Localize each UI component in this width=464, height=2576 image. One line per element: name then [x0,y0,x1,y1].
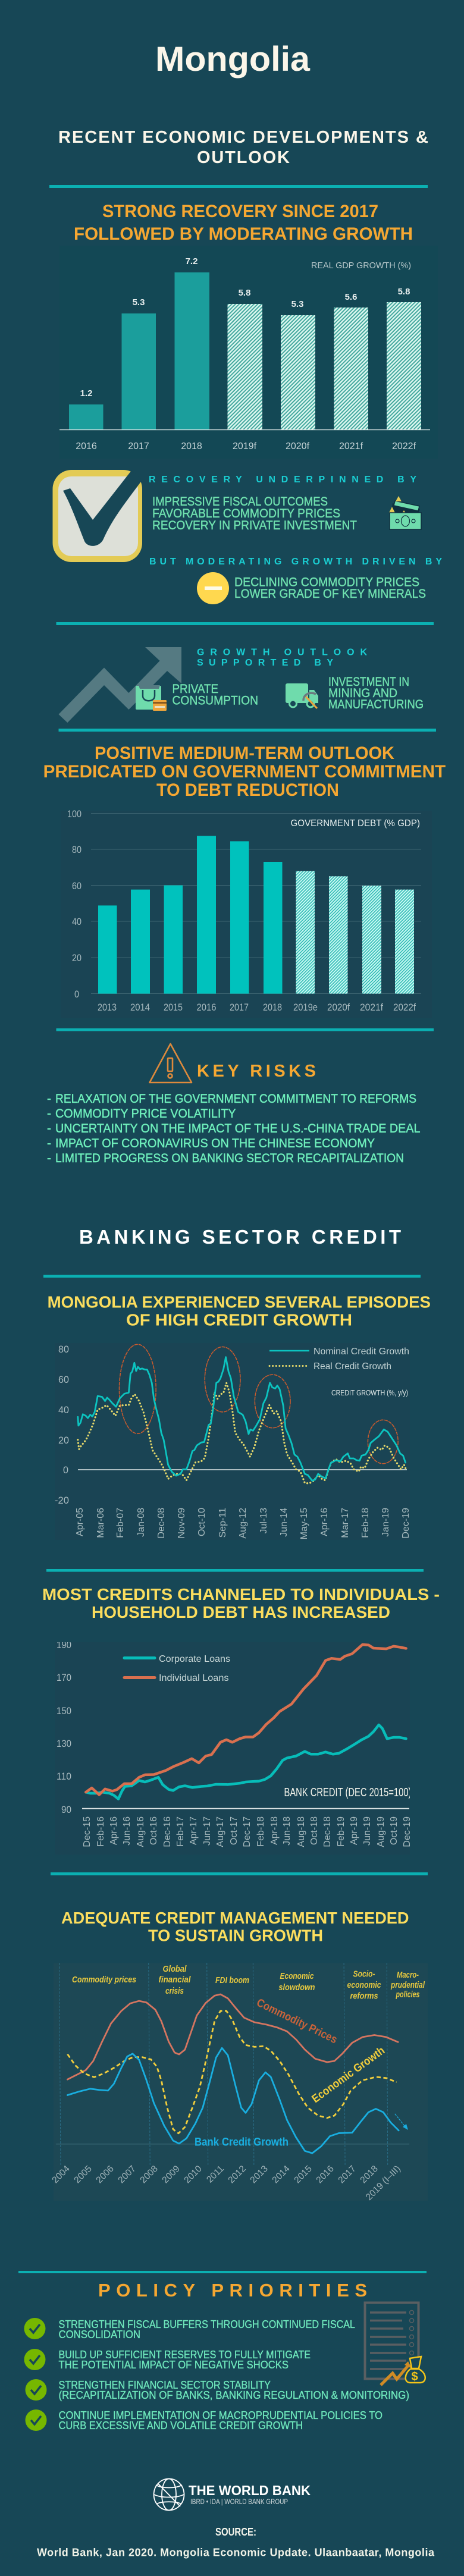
heading: policy priorities: POLICY PRIORITIES [98,2280,367,2301]
x axis labels: Oct-19 [389,1816,399,1845]
x axis labels: Apr-05 [75,1508,85,1536]
section heading: recent economic developments: OUTLOOK [197,148,290,167]
y axis labels: 0 [74,989,79,1000]
icon: shopping bag with card [136,685,167,711]
source citation: World Bank, Jan 2020. Mongolia Economic Update. Ulaanbaatar, Mongolia [37,2547,435,2559]
year labels [76,441,416,451]
y axis labels: 170 [57,1672,71,1683]
x axis labels: 2012 [226,2164,248,2185]
text block: recovery drivers: FAVORABLE COMMODITY PRICES [152,507,340,520]
y axis labels: 60 [72,880,81,892]
heading: adequate credit management: TO SUSTAIN GROWTH [148,1926,323,1944]
x axis labels: 2016 [314,2164,336,2185]
priority 2 [24,2349,311,2371]
x axis labels: Apr-18 [269,1816,280,1845]
legend: Nominal Credit Growth [313,1347,409,1357]
text: investment in mining and manufacturing: MINING AND [328,686,397,700]
heading: several episodes: OF HIGH CREDIT GROWTH [126,1311,352,1329]
x axis labels: Feb-18 [256,1816,266,1847]
priority 1: STRENGTHEN FISCAL BUFFERS THROUGH CONTINUED FISCAL [58,2318,355,2330]
text: private consumption: PRIVATE [173,682,218,696]
chart subtitle: government debt: GOVERNMENT DEBT (% GDP) [290,818,420,829]
period labels: prudential [390,1981,425,1990]
x axis labels: Apr-17 [189,1816,199,1845]
x axis labels: Dec-19 [401,1508,411,1539]
y axis labels: 60 [58,1374,69,1385]
x axis labels: 2009 [160,2164,182,2185]
priority 4 [25,2409,383,2431]
x axis labels: Feb-07 [115,1508,126,1538]
section heading: recent economic developments [58,128,428,167]
x axis labels: Jan-19 [381,1508,391,1537]
label: growth outlook supported by: SUPPORTED BY [197,658,333,668]
priority 1: CONSOLIDATION [58,2329,140,2340]
series: bank credit growth [67,2048,399,2153]
priority 4: CONTINUE IMPLEMENTATION OF MACROPRUDENTIAL POLICIES TO [58,2409,383,2421]
x axis labels: 2014 [270,2164,292,2185]
title: Mongolia [155,40,311,79]
legend: Real Credit Growth [313,1361,391,1372]
value labels: 7.2 [186,256,197,266]
heading: most credits channeled [42,1585,440,1621]
heading: positive medium-term outlook: POSITIVE MEDIUM-TERM OUTLOOK [95,743,394,763]
text: investment in mining and manufacturing: INVESTMENT IN [328,675,409,689]
x axis labels: 2013 [98,1002,117,1013]
period labels: economic [347,1981,381,1990]
priority 2: THE POTENTIAL IMPACT OF NEGATIVE SHOCKS [58,2359,289,2371]
x axis labels: Jun-19 [362,1816,372,1846]
x axis labels: 2019 (I–III) [364,2164,403,2202]
label: growth outlook supported by: GROWTH OUTLOOK [197,647,367,658]
text: investment in mining and manufacturing: MANUFACTURING [328,698,424,711]
period labels [72,1965,425,2001]
plotted series [86,1645,406,1799]
legend [123,1655,230,1681]
logo: the world bank: IBRD • IDA | WORLD BANK GROUP [190,2497,288,2506]
x axis labels: 2021f [360,1002,383,1013]
text block: recovery drivers: IMPRESSIVE FISCAL OUTCOMES [152,495,328,509]
period labels: slowdown [278,1983,315,1993]
y axis labels [57,1639,71,1815]
value labels: 5.3 [291,299,303,309]
logo: the world bank: THE WORLD BANK [189,2483,311,2498]
period labels: crisis [165,1987,184,1996]
section heading: banking sector credit: BANKING SECTOR CREDIT [79,1226,401,1248]
x axis labels: Apr-19 [349,1816,359,1845]
x axis labels: May-15 [299,1508,309,1539]
x axis labels: Dec-15 [82,1816,92,1847]
x axis labels: Oct-10 [197,1508,207,1536]
plotted lines [57,1963,409,2166]
y axis labels: 110 [57,1771,71,1782]
y axis labels: 0 [63,1464,68,1476]
text: investment in mining and manufacturing [328,675,424,711]
y axis labels: 20 [58,1435,69,1446]
series: corporate loans [86,1725,406,1799]
line chart: credit growth [55,1343,411,1540]
icon: large check box [52,470,142,562]
period labels: Economic [280,1972,314,1981]
x axis labels: Oct-16 [149,1816,159,1845]
list: key risks: - [47,1137,51,1150]
priority 2: BUILD UP SUFFICIENT RESERVES TO FULLY MITIGATE [58,2349,311,2361]
x axis labels: 2011 [205,2164,226,2185]
y axis labels [67,808,81,1000]
heading: positive medium-term outlook [43,743,446,800]
list: policy priorities [24,2318,409,2431]
x axis labels: 2004 [50,2164,72,2185]
series: economic growth [67,2011,397,2133]
x axis labels: 2015 [164,1002,183,1013]
text block: moderating drivers [234,576,426,601]
curve label: economic growth: Economic Growth [310,2044,387,2106]
y axis labels: 190 [57,1639,71,1651]
x axis labels: 2014 [130,1002,150,1013]
bars: forecasts [296,871,414,994]
year labels: 2016 [76,441,97,451]
period labels: reforms [350,1992,378,2001]
bars: actuals [98,836,282,994]
list: key risks: RELAXATION OF THE GOVERNMENT COMMITMENT TO REFORMS [55,1092,416,1106]
x axis labels: Dec-18 [322,1816,333,1847]
year labels: 2018 [181,441,202,451]
arrow head [403,2124,408,2130]
icon: globe [153,2479,184,2510]
x axis labels: Nov-09 [177,1508,187,1539]
icon: minus circle [197,572,229,604]
list: key risks: LIMITED PROGRESS ON BANKING SECTOR RECAPITALIZATION [55,1151,404,1165]
period labels: Macro- [397,1971,419,1980]
x axis labels: Feb-17 [175,1816,186,1847]
x axis labels: Jun-17 [202,1816,212,1846]
list: key risks [47,1092,420,1165]
heading: several episodes [48,1293,431,1329]
section heading: recent economic developments: RECENT ECONOMIC DEVELOPMENTS & [58,128,428,147]
series: commodity prices [67,1994,398,2079]
x axis labels: Feb-19 [336,1816,346,1847]
y axis labels: 90 [61,1804,71,1815]
x axis labels: 2015 [292,2164,314,2185]
series: real credit growth [78,1383,406,1483]
curve label: commodity prices: Commodity Prices [255,1997,339,2046]
x axis labels: Aug-17 [215,1816,225,1847]
x axis labels: Dec-16 [162,1816,173,1847]
x axis labels: Dec-08 [156,1508,167,1539]
chart subtitle: bank credit: BANK CREDIT (DEC 2015=100) [284,1786,412,1799]
x axis labels: 2008 [138,2164,160,2185]
list: key risks: COMMODITY PRICE VOLATILITY [55,1107,236,1121]
text block: recovery drivers [152,495,357,532]
x axis labels [75,1508,411,1539]
icon: rising zigzag arrow [58,647,181,723]
priority 1 [24,2318,355,2340]
bar chart: government debt [61,808,432,1018]
priority 3 [25,2379,409,2401]
x axis labels: Feb-16 [96,1816,106,1847]
x axis labels: 2019e [293,1002,318,1013]
value labels: 1.2 [80,388,92,399]
x axis labels: 2022f [393,1002,416,1013]
x axis labels: Jun-18 [282,1816,292,1846]
year labels: 2022f [392,441,416,451]
heading: strong recovery: STRONG RECOVERY SINCE 2017 [102,202,378,221]
value labels: 5.8 [239,288,250,298]
heading: key risks: KEY RISKS [197,1062,316,1081]
value labels: 5.8 [398,287,410,297]
heading: positive medium-term outlook: PREDICATED ON GOVERNMENT COMMITMENT [43,762,446,782]
x axis labels: Jul-13 [259,1508,269,1534]
text block: moderating drivers: LOWER GRADE OF KEY MINERALS [234,587,426,601]
text block: recovery drivers: RECOVERY IN PRIVATE INVESTMENT [152,519,357,532]
label: growth outlook supported by [197,647,367,668]
series: nominal credit growth [78,1357,406,1480]
year labels: 2021f [339,441,363,451]
x axis labels [50,2164,403,2202]
period labels: Socio- [353,1970,375,1979]
x axis labels [98,1002,416,1013]
series: individual loans [86,1645,406,1794]
text: private consumption: CONSUMPTION [173,694,258,708]
x axis labels: Feb-18 [360,1508,371,1538]
priority 4: CURB EXCESSIVE AND VOLATILE CREDIT GROWTH [58,2420,303,2431]
icon: checklist document with money bag [365,2303,425,2385]
y axis labels: 100 [67,808,81,820]
x axis labels: 2013 [248,2164,270,2185]
icon: money [389,496,421,529]
heading: several episodes: MONGOLIA EXPERIENCED SEVERAL EPISODES [48,1293,431,1311]
x axis labels: Aug-12 [238,1508,248,1539]
x axis labels: 2016 [196,1002,217,1013]
value labels: 5.6 [345,292,357,302]
plotted series [78,1344,406,1483]
list: key risks: - [47,1092,51,1106]
y axis labels: 80 [58,1344,69,1355]
y axis labels: 150 [57,1705,71,1717]
x axis labels: 2007 [116,2164,138,2185]
x axis labels: Dec-19 [402,1816,412,1847]
x axis labels: Oct-17 [229,1816,239,1845]
x axis labels: Aug-16 [136,1816,146,1847]
y axis labels [55,1344,69,1506]
period labels: policies [396,1990,420,2000]
value labels [80,256,410,399]
chart subtitle: credit growth: CREDIT GROWTH (%, y/y) [331,1389,408,1397]
x axis labels: Oct-18 [309,1816,319,1845]
x axis labels: Jun-16 [122,1816,132,1846]
line chart: credit, growth and commodity prices [50,1963,428,2202]
y axis labels: 40 [58,1404,69,1416]
y axis labels: 40 [72,916,81,927]
year labels: 2020f [286,441,310,451]
bars: actuals [69,272,209,429]
list: key risks: IMPACT OF CORONAVIRUS ON THE CHINESE ECONOMY [55,1137,375,1150]
period labels: Commodity prices [72,1975,136,1985]
year labels: 2017 [128,441,149,451]
x axis labels: 2006 [94,2164,116,2185]
text: private consumption [173,682,258,708]
legend [269,1347,409,1372]
x axis labels: Mar-17 [340,1508,350,1538]
period labels: Global [163,1965,187,1974]
legend: Corporate Loans [159,1654,230,1664]
x axis labels: 2018 [263,1002,282,1013]
x axis labels: Jun-14 [279,1508,289,1537]
text block: moderating drivers: DECLINING COMMODITY PRICES [234,576,419,589]
source label: SOURCE: [215,2526,256,2538]
curve label: bank credit growth: Bank Credit Growth [195,2136,289,2148]
priority 3: STRENGTHEN FINANCIAL SECTOR STABILITY [58,2379,271,2391]
x axis labels: Dec-17 [242,1816,252,1847]
x axis labels: Jan-08 [136,1508,146,1537]
x axis labels: 2010 [182,2164,204,2185]
label: but moderating growth driven by: BUT MODERATING GROWTH DRIVEN BY [149,557,442,567]
y axis labels: 80 [72,844,81,855]
arrow: credit trend [395,2114,405,2126]
heading: most credits channeled: MOST CREDITS CHANNELED TO INDIVIDUALS - [42,1585,440,1604]
value labels: 5.3 [133,297,145,308]
y axis labels: 130 [57,1738,71,1749]
period labels: financial [158,1975,191,1985]
x axis labels: 2017 [230,1002,249,1013]
heading: most credits channeled: HOUSEHOLD DEBT HAS INCREASED [92,1603,390,1621]
x axis labels: Aug-19 [376,1816,386,1847]
x axis labels: Aug-18 [296,1816,306,1847]
period labels: FDI boom [215,1976,249,1985]
bar chart: real GDP growth [59,246,438,459]
heading: strong recovery [74,202,413,244]
highlight ellipses [119,1344,398,1464]
x axis labels: 2018 [358,2164,380,2185]
icon: mining truck [286,683,318,708]
icon: checklist document with money bag: $ [411,2370,418,2383]
x axis labels: Apr-16 [319,1508,330,1536]
x axis labels: Sep-11 [218,1508,228,1538]
heading: strong recovery: FOLLOWED BY MODERATING GROWTH [74,224,413,244]
bars: forecasts [227,302,421,429]
x axis labels: 2017 [336,2164,358,2185]
label: recovery underpinned by: RECOVERY UNDERPINNED BY [149,475,416,485]
list: key risks: - [47,1151,51,1165]
heading: adequate credit management: ADEQUATE CREDIT MANAGEMENT NEEDED [61,1909,409,1927]
x axis labels [82,1816,412,1847]
y axis labels: -20 [55,1495,69,1506]
chart subtitle: real GDP growth: REAL GDP GROWTH (%) [311,261,411,271]
x axis labels: Apr-16 [109,1816,119,1845]
x axis labels: 2005 [72,2164,94,2185]
icon: warning triangle [150,1044,192,1083]
legend: Individual Loans [159,1673,228,1683]
priority 3: (RECAPITALIZATION OF BANKS, BANKING REGULATION & MONITORING) [58,2389,409,2401]
heading: adequate credit management [61,1909,409,1944]
list: key risks: - [47,1122,51,1135]
x axis labels: Mar-06 [96,1508,106,1538]
list: key risks: - [47,1107,51,1121]
heading: positive medium-term outlook: TO DEBT REDUCTION [156,780,339,800]
period dividers [59,1963,388,2166]
y axis labels: 20 [72,952,81,964]
logo: the world bank [153,2479,311,2510]
line chart: bank credit [55,1639,412,1855]
list: key risks: UNCERTAINTY ON THE IMPACT OF THE U.S.-CHINA TRADE DEAL [55,1122,420,1135]
year labels: 2019f [233,441,257,451]
x axis labels: 2020f [327,1002,350,1013]
